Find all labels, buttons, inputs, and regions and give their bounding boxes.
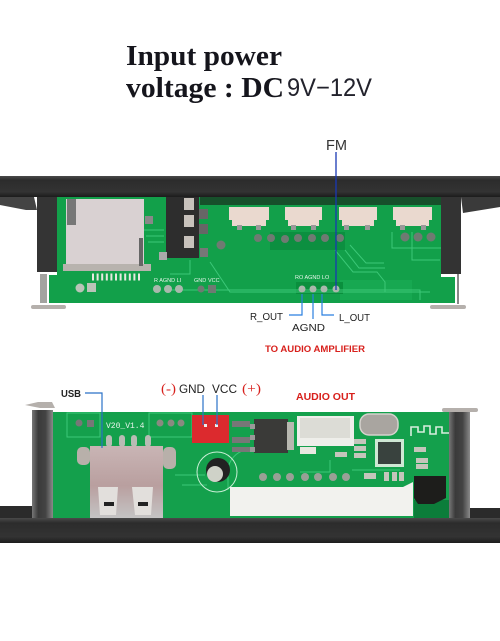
bottom module <box>0 402 500 543</box>
label: to audio amplifier: TO AUDIO AMPLIFIER <box>265 344 366 354</box>
label: USB <box>61 388 102 448</box>
solder pads <box>153 232 436 293</box>
silkscreen: version: V20_V1.4 <box>106 422 145 431</box>
bottom module PCB <box>52 412 449 518</box>
label: USB: USB <box>61 388 81 400</box>
top module PCB <box>49 197 455 303</box>
header pads <box>76 420 184 447</box>
label: R_OUT <box>250 294 302 323</box>
capacitor <box>197 452 237 492</box>
silkscreen labels: RO AGND LO <box>295 275 330 281</box>
small components <box>335 439 428 481</box>
title: Input power <box>126 40 282 72</box>
title: voltage : DC <box>126 72 284 104</box>
label: FM: FM <box>326 137 347 154</box>
silkscreen labels: GND <box>194 278 206 284</box>
smd parts near connector <box>232 421 250 452</box>
silkscreen labels: R AGND LI <box>154 278 182 284</box>
label: AGND <box>292 294 325 334</box>
label: audio out: AUDIO OUT <box>296 392 355 403</box>
left post <box>25 402 55 518</box>
title <box>126 40 372 104</box>
label: R_OUT: R_OUT <box>250 311 284 323</box>
bottom bar <box>0 518 500 543</box>
IR receiver <box>414 476 446 504</box>
label: AGND: AGND <box>292 322 325 334</box>
label: L_OUT: L_OUT <box>339 312 371 324</box>
label: VCC with plus: VCC <box>212 384 237 396</box>
label: VCC with plus: (+) <box>242 382 261 397</box>
crystal <box>360 414 398 435</box>
chip <box>375 439 404 467</box>
power connector <box>192 415 229 443</box>
right post <box>430 197 500 309</box>
display pins <box>259 473 350 481</box>
silkscreen labels <box>154 275 330 284</box>
title: 9V−12V <box>287 74 372 102</box>
top bar <box>0 176 500 197</box>
right post <box>442 408 478 520</box>
antenna trace <box>411 426 449 436</box>
white display strip <box>230 482 413 516</box>
label: GND with minus: GND <box>179 384 205 396</box>
label: GND with minus: (-) <box>161 382 176 397</box>
top module <box>0 176 500 309</box>
USB port <box>77 446 176 518</box>
buttons <box>229 207 432 230</box>
regulator <box>250 419 294 453</box>
audio jack <box>145 197 208 260</box>
label: L_OUT <box>322 294 371 324</box>
label: VCC with plus <box>212 382 261 425</box>
audio out connector <box>297 416 354 454</box>
left post <box>0 197 66 309</box>
silkscreen labels: VCC <box>208 278 220 284</box>
label: GND with minus <box>161 382 205 425</box>
SD card slot <box>63 199 151 292</box>
